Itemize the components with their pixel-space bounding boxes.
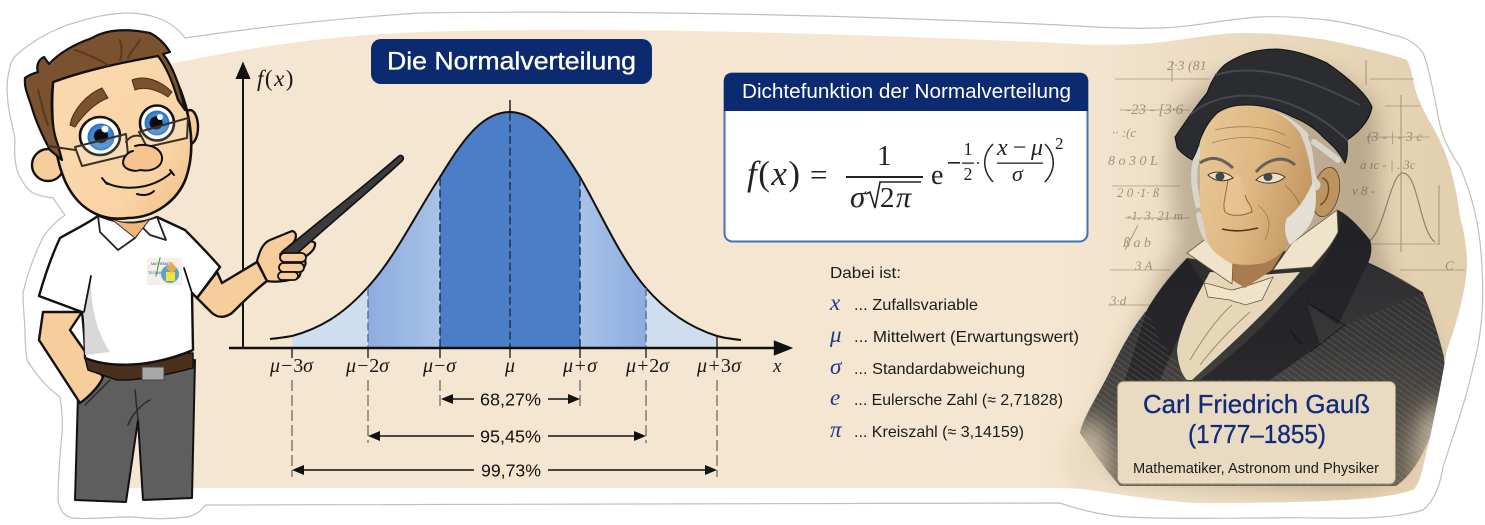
- legend row e: [830, 385, 1063, 410]
- coat fade lower left: [1064, 418, 1112, 498]
- Gauss background notes: v 8 -: [1352, 183, 1375, 198]
- range arrow 99,73%: [292, 460, 717, 480]
- Gauss background notes: 2·3 (81: [1167, 59, 1207, 74]
- Gauss background notes: C: [1445, 258, 1454, 273]
- polo shirt: [39, 216, 220, 365]
- title: Die Normalverteilung: [387, 48, 636, 76]
- density formula: 2: [880, 182, 894, 214]
- face details: [1226, 178, 1250, 214]
- left ear: [32, 149, 64, 181]
- right arm: [197, 262, 267, 317]
- Gauss background notes: 3·d: [1109, 293, 1127, 308]
- chart curve: [270, 112, 741, 340]
- name plate: Mathematiker, Astronom und Physiker: [1133, 461, 1379, 477]
- legend row sigma: σ: [830, 354, 843, 379]
- legend row x: ... Zufallsvariable: [854, 297, 978, 314]
- glasses: [48, 118, 188, 166]
- legend row pi: π: [830, 417, 843, 442]
- Gauss background notes: ·· :(c: [1112, 125, 1136, 140]
- legend: [829, 265, 1079, 442]
- legend: Dabei ist:: [830, 265, 901, 282]
- axis labels: μ+σ: [562, 355, 598, 377]
- name plate: (1777–1855): [1188, 419, 1326, 449]
- legend row x: [829, 290, 978, 315]
- density formula: x−μ: [996, 135, 1043, 161]
- range arrow 99,73%: 99,73%: [481, 460, 541, 480]
- Gauss background notes: -23 - [3·6: [1126, 102, 1184, 118]
- formula panel: [724, 73, 1088, 242]
- formula heading: Dichtefunktion der Normalverteilung: [742, 81, 1071, 103]
- Gauss background notes: 3 A: [1134, 258, 1153, 273]
- coat fade lower right: [1400, 392, 1439, 478]
- range arrow 68,27%: 68,27%: [480, 390, 541, 410]
- axis labels: μ−2σ: [345, 355, 390, 377]
- pointer stick: [280, 155, 403, 261]
- range arrow 95,45%: [368, 426, 646, 446]
- eyebrows: [70, 78, 172, 127]
- shirt collar: [1187, 210, 1338, 284]
- range arrow 68,27%: [441, 390, 580, 410]
- belt: [85, 353, 193, 380]
- shirt logo: [147, 258, 182, 285]
- axis labels: x: [772, 356, 782, 377]
- Gauss background notes: 2 0 ·1· ß: [1117, 185, 1160, 200]
- legend row pi: ... Kreiszahl (≈ 3,14159): [854, 424, 1024, 441]
- density formula: 1: [964, 139, 972, 159]
- legend row e: e: [830, 385, 840, 410]
- shirt logo: TECHNIK: [148, 271, 164, 275]
- neck: [1232, 247, 1286, 288]
- density formula: e: [931, 160, 943, 191]
- hair: [25, 30, 185, 160]
- density formula: f(x): [747, 154, 800, 193]
- density formula: 2: [964, 164, 972, 184]
- Gauss background notes: ß a b: [1122, 236, 1151, 251]
- portrait: Carl Friedrich Gauss: [1064, 49, 1462, 500]
- right ear: [182, 110, 198, 144]
- character: teacher with pointer: [25, 30, 403, 502]
- legend row sigma: ... Standardabweichung: [854, 361, 1025, 378]
- density formula: =: [810, 157, 827, 192]
- neck: [110, 218, 150, 238]
- legend row sigma: [830, 354, 1025, 379]
- ear: [1314, 167, 1340, 217]
- face: [1199, 105, 1313, 265]
- eyes: [80, 106, 174, 155]
- legend row pi: [830, 417, 1024, 442]
- legend row mu: [829, 322, 1079, 347]
- chart fill bands: [292, 100, 717, 348]
- cravat bow: [1204, 277, 1273, 305]
- name plate: [1118, 382, 1396, 484]
- axis labels: μ: [504, 355, 515, 377]
- name plate: Carl Friedrich Gauß: [1143, 389, 1370, 419]
- density formula: 1: [877, 140, 892, 172]
- hand: [257, 231, 315, 282]
- coat: [1080, 210, 1444, 486]
- Gauss background notes: -1. 3. 21 m: [1127, 208, 1183, 223]
- face: [52, 54, 191, 219]
- beard: [1285, 180, 1316, 245]
- axis labels: μ+3σ: [696, 355, 742, 377]
- axis labels: f(x): [257, 66, 295, 91]
- hat: [1175, 49, 1372, 163]
- axis labels: μ−3σ: [269, 355, 314, 377]
- title: [371, 39, 652, 84]
- legend row e: ... Eulersche Zahl (≈ 2,71828): [854, 392, 1063, 409]
- y axis: [237, 64, 249, 347]
- density formula: σ: [850, 179, 867, 214]
- fingers: [278, 253, 306, 280]
- axis labels: μ+2σ: [625, 355, 670, 377]
- belt buckle: [142, 367, 164, 380]
- x axis: [229, 342, 790, 354]
- formula header: [724, 73, 1088, 111]
- pants: [75, 360, 195, 502]
- axis labels: [257, 66, 782, 377]
- Gauss background notes: (3 - | - 3 c: [1367, 130, 1423, 145]
- density formula: 2: [1055, 134, 1064, 153]
- chart: normal distribution: [229, 64, 790, 480]
- Gauss background notes: a ıc - | . 3c: [1360, 157, 1416, 172]
- coat pencil hatching: [1080, 293, 1444, 486]
- density formula: [747, 134, 1064, 214]
- shirt logo: MATHEMATIK: [151, 262, 174, 266]
- shirt collar: [98, 216, 166, 250]
- legend row x: x: [829, 290, 841, 315]
- density formula: σ: [1012, 161, 1024, 186]
- coat lapels: [1125, 210, 1371, 380]
- chart dashed guides: [292, 100, 717, 477]
- nose: [123, 145, 162, 171]
- range arrow 95,45%: 95,45%: [480, 426, 541, 446]
- axis labels: μ−σ: [422, 355, 457, 377]
- Gauss background notes: [1108, 59, 1465, 308]
- density formula: π: [896, 181, 912, 214]
- legend row mu: ... Mittelwert (Erwartungswert): [854, 329, 1079, 346]
- Gauss background notes: 8 o 3 0 L: [1108, 154, 1158, 169]
- legend row mu: μ: [829, 322, 842, 347]
- left arm in pocket: [39, 312, 103, 403]
- shirt and cravat: [1177, 272, 1300, 380]
- mouth: [102, 170, 174, 195]
- hair: [1194, 96, 1338, 240]
